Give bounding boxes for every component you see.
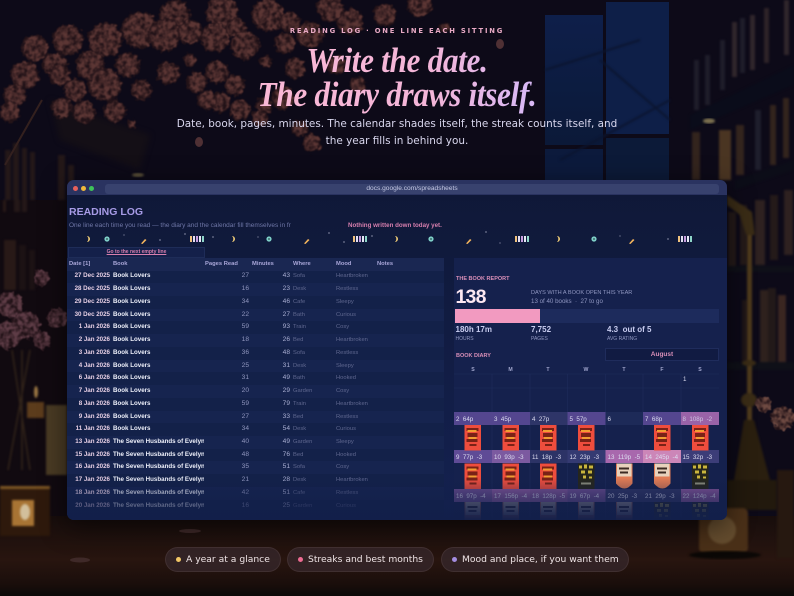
weekday labels: F <box>660 367 664 373</box>
table rows: The Seven Husbands of Evelyn <box>113 463 204 470</box>
table rows: Cosy <box>336 324 349 330</box>
left shelf <box>3 143 74 290</box>
table rows: Book Lovers <box>113 298 150 305</box>
table rows: 30 Dec 2025 <box>75 311 110 318</box>
stat: hours: HOURS <box>456 336 474 342</box>
calendar day labels: 4 27p <box>532 416 550 423</box>
table rows: 16 <box>242 285 249 292</box>
table rows: 17 Jan 2026 <box>75 476 110 483</box>
calendar day labels: 9 77p -3 <box>456 454 483 461</box>
table rows: Garden <box>293 503 312 509</box>
table rows: 34 <box>242 425 249 432</box>
calendar day labels: 22 124p -4 <box>682 493 716 500</box>
address bar: docs.google.com/spreadsheets <box>366 185 458 192</box>
title: Write the date. <box>306 41 488 80</box>
today notice: Nothing written down today yet. <box>348 222 442 229</box>
table rows: 79 <box>283 400 290 407</box>
table rows: Book Lovers <box>113 323 150 330</box>
progress bar <box>455 309 719 323</box>
stat: rating: 4.3 out of 5 <box>607 325 651 334</box>
table rows: Cosy <box>336 464 349 470</box>
subtitle: the year fills in behind you. <box>326 134 468 146</box>
table rows: 43 <box>283 272 290 279</box>
table rows: Sleepy <box>336 439 354 445</box>
title <box>42 44 752 114</box>
table rows: 8 Jan 2026 <box>79 400 110 407</box>
table rows: Book Lovers <box>113 336 150 343</box>
table rows: 29 <box>283 387 290 394</box>
table rows: Garden <box>293 388 312 394</box>
table rows: 33 <box>283 413 290 420</box>
calendar day labels: 13 119p -5 <box>608 454 641 461</box>
table <box>0 516 794 596</box>
table rows: Curious <box>336 312 356 318</box>
brass lamp <box>727 195 777 510</box>
table rows: Book Lovers <box>113 362 150 369</box>
table rows: 93 <box>283 323 290 330</box>
table rows: 28 <box>283 476 290 483</box>
table rows: Bath <box>293 312 305 318</box>
left bouquet and candles <box>0 270 67 349</box>
address bar <box>105 184 719 194</box>
panel: book report <box>454 258 727 520</box>
table rows: Bed <box>293 452 303 458</box>
table rows: 59 <box>242 323 249 330</box>
table rows: 18 Jan 2026 <box>75 489 110 496</box>
browser title bar <box>67 180 727 195</box>
table rows: 40 <box>242 438 249 445</box>
table rows: 18 <box>242 336 249 343</box>
report heading: THE BOOK REPORT <box>456 276 509 282</box>
calendar day labels: 15 32p -3 <box>682 454 713 461</box>
table rows: 6 Jan 2026 <box>79 374 110 381</box>
table rows: 49 <box>283 374 290 381</box>
calendar day labels: 16 97p -4 <box>456 493 486 500</box>
table rows: Heartbroken <box>336 273 368 279</box>
feature pill: year at a glance: A year at a glance <box>186 554 270 565</box>
decorative icon strip <box>87 231 692 244</box>
table rows: Sofa <box>293 464 305 470</box>
table rows: 51 <box>283 463 290 470</box>
table rows: 16 <box>242 502 249 509</box>
table rows: 36 <box>242 349 249 356</box>
calendar day labels: 6 <box>608 416 612 423</box>
table rows: 54 <box>283 425 290 432</box>
calendar day labels: 5 57p <box>570 416 587 423</box>
stat: rating <box>607 325 652 342</box>
calendar day labels: 7 68p <box>645 416 663 423</box>
stat: rating: AVG RATING <box>607 336 637 342</box>
table rows: Sleepy <box>336 363 354 369</box>
table header: Book <box>113 261 128 267</box>
table rows: Restless <box>336 490 358 496</box>
table rows: The Seven Husbands of Evelyn <box>113 502 204 509</box>
weekday labels: S <box>698 367 702 373</box>
table header: Pages Read <box>205 261 238 267</box>
table rows: Book Lovers <box>113 311 150 318</box>
table rows: 23 <box>283 285 290 292</box>
calendar day labels: 14 245p -4 <box>645 454 679 461</box>
table rows: 51 <box>283 489 290 496</box>
table rows: 27 <box>242 272 249 279</box>
month selector <box>605 348 719 361</box>
window <box>545 2 670 180</box>
table rows: Desk <box>293 363 306 369</box>
bottom fade <box>67 478 727 520</box>
books progress caption: 13 of 40 books · 27 to go <box>531 298 603 305</box>
calendar day labels: 21 29p -3 <box>645 493 675 500</box>
table rows: 25 <box>242 362 249 369</box>
table rows: 22 <box>242 311 249 318</box>
weekday labels: S <box>471 367 475 373</box>
table rows: 48 <box>283 349 290 356</box>
table rows: Heartbroken <box>336 477 368 483</box>
table rows: 29 Dec 2025 <box>75 298 110 305</box>
feature pill: mood <box>441 547 629 572</box>
feature pill: mood: Mood and place, if you want them <box>462 554 619 565</box>
table rows: Restless <box>336 350 358 356</box>
table rows: 48 <box>242 451 249 458</box>
blossoms <box>0 0 450 152</box>
table rows: 9 Jan 2026 <box>79 413 110 420</box>
panel: spreadsheet window <box>67 180 727 520</box>
table rows: 16 Jan 2026 <box>75 463 110 470</box>
table rows: Cafe <box>293 299 305 305</box>
table header: Mood <box>336 261 351 267</box>
table rows: 27 <box>242 413 249 420</box>
calendar day labels: 18 128p -5 <box>532 493 566 500</box>
month selector: August <box>651 351 673 358</box>
table rows: 21 <box>242 476 249 483</box>
calendar day labels: 1 <box>683 376 687 383</box>
table rows: Train <box>293 324 306 330</box>
table rows: Heartbroken <box>336 337 368 343</box>
table rows: 28 Dec 2025 <box>75 285 110 292</box>
stat: pages: PAGES <box>531 336 548 342</box>
right flowers and glass <box>755 396 794 430</box>
table rows: 27 Dec 2025 <box>75 272 110 279</box>
table rows: 13 Jan 2026 <box>75 438 110 445</box>
window dots <box>73 186 94 191</box>
table rows: 20 <box>242 387 249 394</box>
reading log table <box>67 258 444 520</box>
stat: hours <box>456 325 492 342</box>
table rows: The Seven Husbands of Evelyn <box>113 451 204 458</box>
table rows: Garden <box>293 439 312 445</box>
table rows: 46 <box>283 298 290 305</box>
table rows: 7 Jan 2026 <box>79 387 110 394</box>
calendar day labels <box>456 376 716 500</box>
table header: Minutes <box>252 261 274 267</box>
table header <box>67 258 444 271</box>
stat: pages: 7,752 <box>531 325 551 334</box>
calendar day labels: 17 156p -4 <box>494 493 528 500</box>
table rows: 31 <box>242 374 249 381</box>
table rows: 11 Jan 2026 <box>76 425 110 432</box>
weekday labels: M <box>508 367 513 373</box>
table rows: Desk <box>293 286 306 292</box>
subtitle <box>177 118 617 146</box>
calendar day labels: 8 108p -2 <box>682 416 713 423</box>
table rows: Train <box>293 401 306 407</box>
table rows: Book Lovers <box>113 272 150 279</box>
table rows: 76 <box>283 451 290 458</box>
table rows: Sleepy <box>336 299 354 305</box>
right shelves <box>690 0 794 370</box>
table rows: The Seven Husbands of Evelyn <box>113 489 204 496</box>
feature pill: streaks <box>287 547 434 572</box>
stat: pages <box>531 325 551 342</box>
table rows: Book Lovers <box>113 387 150 394</box>
days count: 138 <box>456 286 486 308</box>
table rows: 4 Jan 2026 <box>79 362 110 369</box>
table header: Notes <box>377 261 393 267</box>
table rows: 34 <box>242 298 249 305</box>
table rows: Curious <box>336 503 356 509</box>
table rows: The Seven Husbands of Evelyn <box>113 438 204 445</box>
table rows: Desk <box>293 426 306 432</box>
table rows: Hooked <box>336 375 356 381</box>
table header: Date [1] <box>69 261 90 267</box>
table rows: The Seven Husbands of Evelyn <box>113 476 204 483</box>
table rows: Book Lovers <box>113 413 150 420</box>
table rows: Book Lovers <box>113 349 150 356</box>
table rows: 2 Jan 2026 <box>79 336 110 343</box>
table rows: 42 <box>242 489 249 496</box>
calendar day labels: 12 23p -3 <box>570 454 600 461</box>
book covers <box>464 425 708 528</box>
table rows: Desk <box>293 477 306 483</box>
table rows: Bed <box>293 414 303 420</box>
table rows: Book Lovers <box>113 374 150 381</box>
calendar day labels: 2 64p <box>456 416 474 423</box>
table rows: 26 <box>283 336 290 343</box>
table rows: Sofa <box>293 350 305 356</box>
table rows: 49 <box>283 438 290 445</box>
table header: Where <box>293 261 311 267</box>
days caption: DAYS WITH A BOOK OPEN THIS YEAR <box>531 290 632 296</box>
table rows: 59 <box>242 400 249 407</box>
weekday labels: T <box>622 367 626 373</box>
table rows: 27 <box>283 311 290 318</box>
weekday labels: T <box>546 367 550 373</box>
table rows: Hooked <box>336 452 356 458</box>
diary heading: BOOK DIARY <box>456 353 491 359</box>
calendar day labels: 20 25p -3 <box>608 493 638 500</box>
table rows: Bath <box>293 375 305 381</box>
table rows: 31 <box>283 362 290 369</box>
table rows: Cafe <box>293 490 305 496</box>
jump link: Go to the next empty line <box>107 249 166 255</box>
table rows: 20 Jan 2026 <box>75 502 110 509</box>
table rows: 35 <box>242 463 249 470</box>
sheet title: READING LOG <box>69 206 143 218</box>
table rows: Bed <box>293 337 303 343</box>
calendar day labels: 19 67p -4 <box>570 493 600 500</box>
table rows: 1 Jan 2026 <box>79 323 110 330</box>
calendar day labels: 10 93p -3 <box>494 454 524 461</box>
weekday labels: W <box>584 367 589 373</box>
feature pill: streaks: Streaks and best months <box>308 554 423 565</box>
jump link <box>68 247 205 258</box>
table rows: Cosy <box>336 388 349 394</box>
table rows: Heartbroken <box>336 401 368 407</box>
table rows: Book Lovers <box>113 285 150 292</box>
calendar day labels: 11 18p -3 <box>532 454 562 461</box>
table rows: Book Lovers <box>113 400 150 407</box>
stat: hours: 180h 17m <box>456 325 492 334</box>
table rows: Restless <box>336 414 358 420</box>
table rows: 25 <box>283 502 290 509</box>
subtitle: Date, book, pages, minutes. The calendar shades itself, the streak counts itself, and <box>177 118 617 130</box>
eyebrow heading: READING LOG · ONE LINE EACH SITTING <box>290 27 504 35</box>
calendar <box>454 367 719 518</box>
title: The diary draws itself. <box>258 75 536 114</box>
calendar day labels: 3 45p <box>494 416 512 423</box>
table rows <box>74 272 368 509</box>
weekday labels <box>471 367 702 373</box>
feature pill: year at a glance <box>165 547 281 572</box>
table rows: 3 Jan 2026 <box>79 349 110 356</box>
table rows: 15 Jan 2026 <box>75 451 110 458</box>
calendar day cells <box>454 412 719 502</box>
table rows: Curious <box>336 426 356 432</box>
table rows: Book Lovers <box>113 425 150 432</box>
table rows: Sofa <box>293 273 305 279</box>
table rows: Restless <box>336 286 358 292</box>
